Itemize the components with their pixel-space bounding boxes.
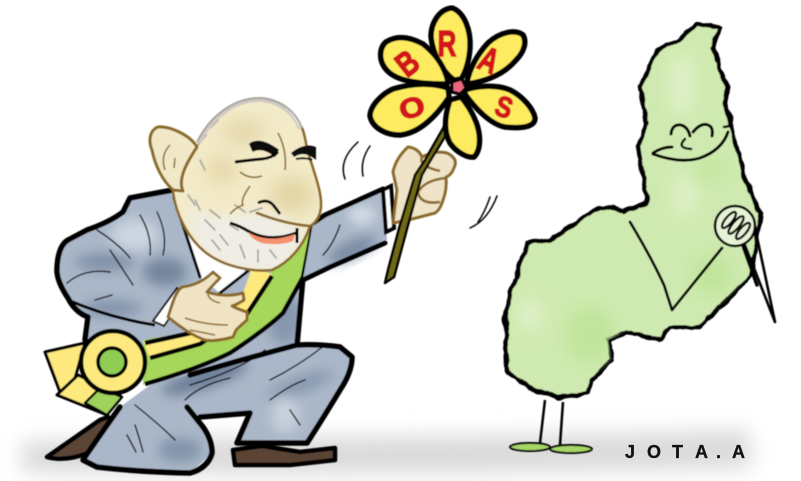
raised fist [393, 147, 455, 223]
trouser leg [83, 345, 352, 473]
sash tail [45, 343, 122, 415]
letter B: B [388, 43, 427, 85]
face [653, 124, 730, 160]
motion lines [343, 142, 497, 228]
OBRAS flower [370, 8, 535, 157]
caricature: president kneeling [45, 98, 497, 473]
right arm [303, 189, 387, 279]
ground shadow [22, 430, 752, 474]
sash rosette [81, 331, 145, 393]
map body [505, 23, 760, 398]
signature: JOTA.A [625, 442, 745, 462]
feet [510, 443, 592, 453]
facial features [230, 142, 316, 244]
arm [630, 222, 722, 310]
letter S: S [491, 89, 517, 125]
letter R: R [438, 24, 456, 64]
flower stem [385, 125, 452, 283]
head [173, 98, 321, 272]
hand on chest [168, 272, 247, 341]
front shoe [233, 446, 335, 465]
shirt collar lines [174, 198, 248, 293]
back shoe [47, 417, 118, 459]
shirt cuff on raised arm [383, 186, 394, 232]
map character [505, 23, 775, 453]
presidential sash [143, 223, 313, 385]
legs [540, 400, 563, 445]
petals [370, 8, 535, 157]
shirt [175, 200, 245, 293]
letter O: O [396, 91, 428, 126]
ear [150, 127, 197, 191]
fork held in hand [715, 206, 775, 322]
white cuff on left arm [153, 288, 185, 326]
flower centre [452, 79, 466, 94]
suit jacket [57, 190, 313, 385]
letter A: A [473, 39, 505, 82]
